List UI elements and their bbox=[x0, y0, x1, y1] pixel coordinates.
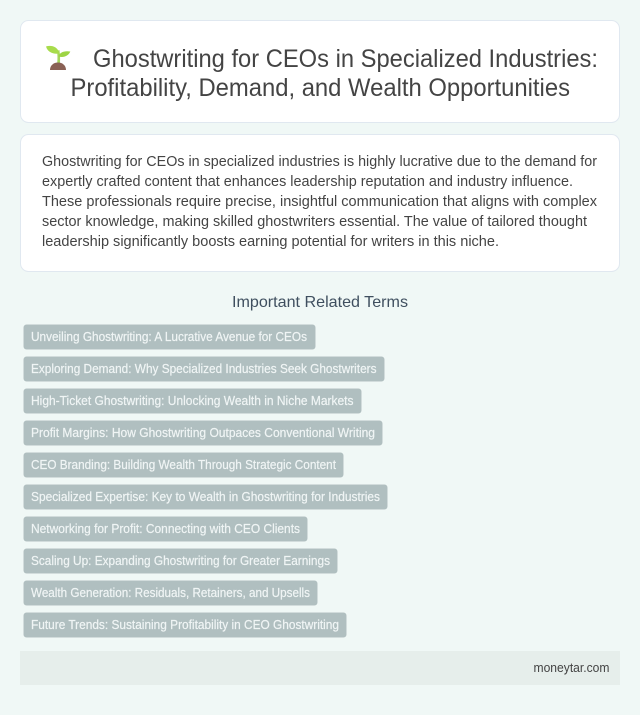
heading bbox=[70, 45, 598, 102]
tag 6 bbox=[24, 484, 388, 510]
panel: intro text: These professionals require precise, insightful communication that aligns with complex bbox=[42, 194, 598, 210]
tag 1 bbox=[24, 324, 316, 350]
tag 3 bbox=[24, 388, 362, 414]
icon: seedling bbox=[46, 46, 70, 70]
heading: Ghostwriting for CEOs in Specialized Industries: bbox=[93, 45, 598, 73]
tag 8: Scaling Up: Expanding Ghostwriting for Greater Earnings bbox=[31, 554, 330, 568]
tag 8 bbox=[24, 548, 338, 574]
tag 7 bbox=[24, 516, 308, 542]
tag 5 bbox=[24, 452, 344, 478]
tag 5: CEO Branding: Building Wealth Through Strategic Content bbox=[31, 458, 336, 472]
tag 10: Future Trends: Sustaining Profitability in CEO Ghostwriting bbox=[31, 618, 339, 632]
tag 4: Profit Margins: How Ghostwriting Outpaces Conventional Writing bbox=[31, 426, 375, 440]
panel: intro text: sector knowledge, making skilled ghostwriters essential. The value of tailored thought bbox=[42, 214, 587, 230]
panel: intro text: leadership significantly boosts earning potential for writers in this niche. bbox=[42, 234, 499, 250]
heading: Profitability, Demand, and Wealth Opportunities bbox=[70, 74, 570, 102]
list: related term tags bbox=[24, 324, 388, 638]
tag 9 bbox=[24, 580, 318, 606]
panel: intro text bbox=[20, 134, 620, 272]
heading: related terms: Important Related Terms bbox=[232, 294, 408, 311]
panel: intro text: expertly crafted content that enhances leadership reputation and industry influence. bbox=[42, 174, 573, 190]
tag 10 bbox=[24, 612, 346, 638]
tag 6: Specialized Expertise: Key to Wealth in Ghostwriting for Industries bbox=[31, 490, 380, 504]
tag 1: Unveiling Ghostwriting: A Lucrative Avenue for CEOs bbox=[31, 330, 307, 344]
tag 9: Wealth Generation: Residuals, Retainers, and Upsells bbox=[31, 586, 310, 600]
tag 7: Networking for Profit: Connecting with CEO Clients bbox=[31, 522, 300, 536]
tag 2 bbox=[24, 356, 384, 382]
tag 2: Exploring Demand: Why Specialized Industries Seek Ghostwriters bbox=[31, 362, 376, 376]
footer bar: moneytar.com bbox=[534, 661, 610, 675]
tag 3: High-Ticket Ghostwriting: Unlocking Wealth in Niche Markets bbox=[31, 394, 354, 408]
panel: intro text: Ghostwriting for CEOs in specialized industries is highly lucrative due to the demand for bbox=[42, 154, 597, 170]
tag 4 bbox=[24, 420, 382, 446]
footer bar bbox=[20, 651, 620, 685]
panel: title card bbox=[20, 20, 620, 122]
